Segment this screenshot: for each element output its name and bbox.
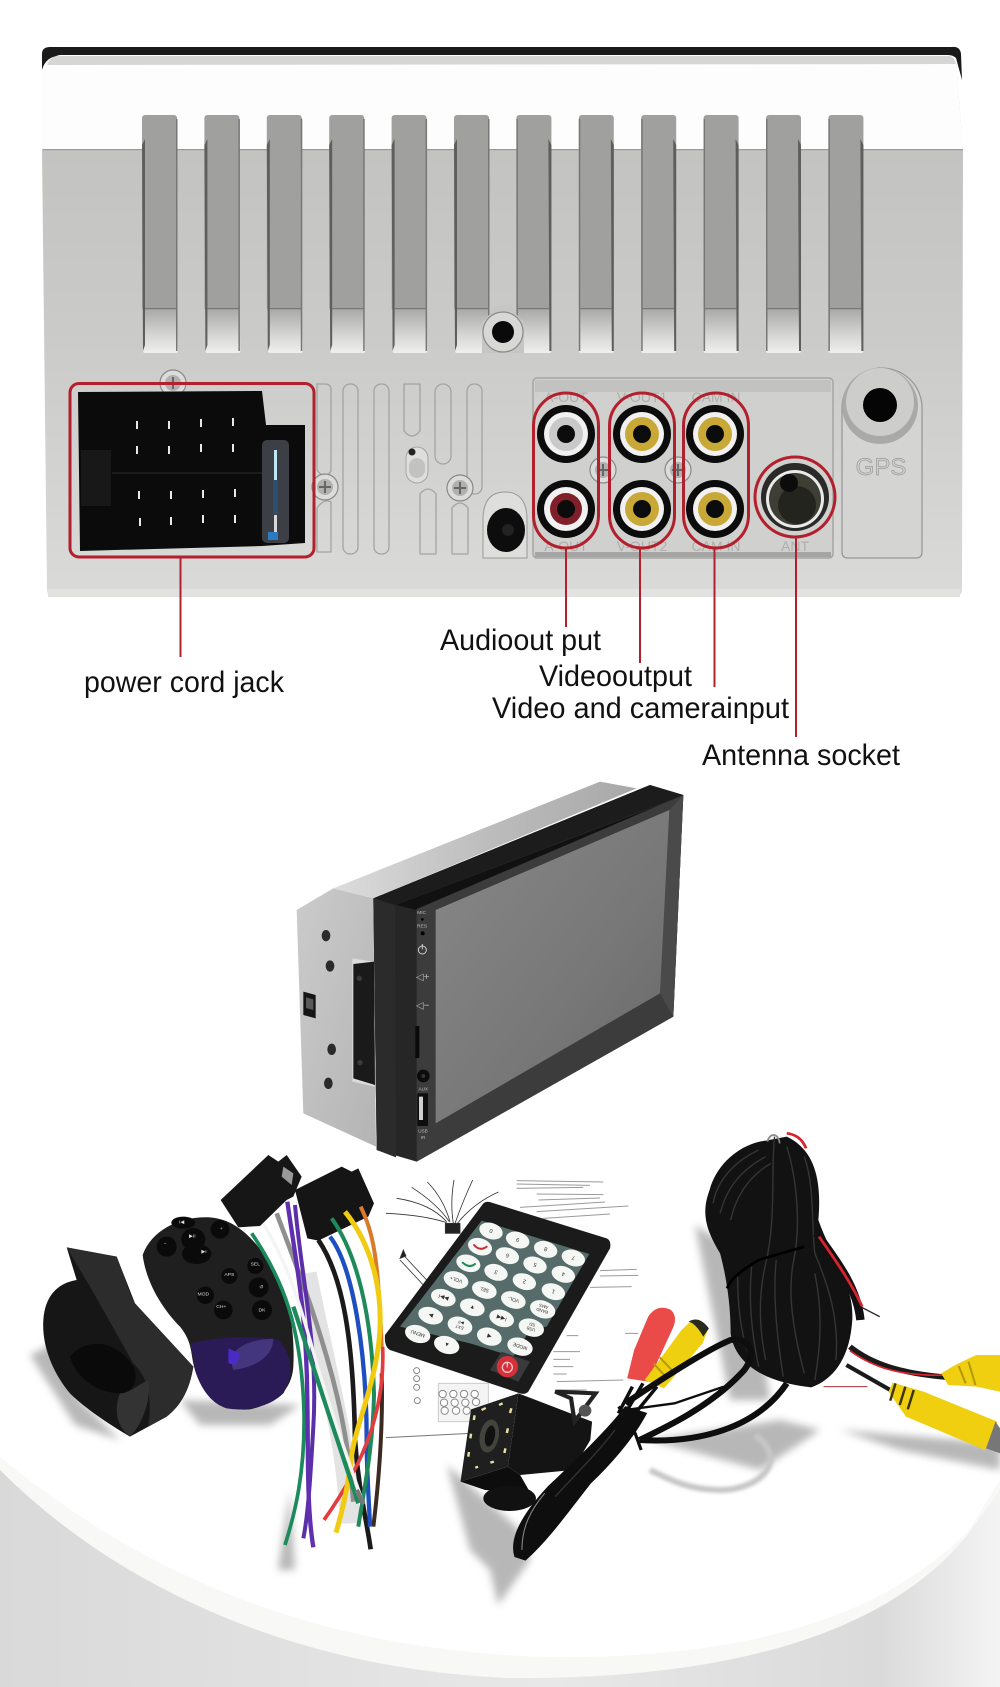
plate labels: ANT <box>781 538 809 554</box>
keypad labels, printed upside down: ▼ <box>469 1303 476 1310</box>
leader: video and camera input <box>714 548 716 687</box>
keypad labels, printed upside down: MODE <box>512 1340 528 1351</box>
power button <box>497 1356 518 1377</box>
looped signal cable <box>514 1340 787 1560</box>
side of chassis <box>297 888 376 1147</box>
cable shadow <box>650 1420 820 1470</box>
aux jack <box>417 1070 430 1082</box>
keypad labels, printed upside down: 6 <box>505 1251 510 1258</box>
side port <box>303 992 316 1018</box>
touch screen <box>436 810 669 1123</box>
plate labels: CAM IN <box>692 389 740 405</box>
keyhole slot <box>406 447 428 483</box>
side mounting holes <box>322 930 336 1089</box>
loose cable shadow loop <box>650 1435 770 1490</box>
keypad labels, printed upside down: I◀◀ <box>496 1313 508 1322</box>
wire: purple inner <box>287 1202 313 1547</box>
yellow video socket 1 <box>613 405 671 463</box>
yellow camera socket 1 <box>686 405 744 463</box>
coil strands <box>713 1137 837 1380</box>
strap shadow <box>30 1340 120 1440</box>
RCA sockets <box>537 405 744 538</box>
keypad labels, printed upside down: SD <box>529 1321 536 1328</box>
instruction manual sheet <box>386 1180 638 1438</box>
button labels: MOD <box>198 1291 210 1297</box>
plate labels: V-OUT1 <box>617 389 667 405</box>
camera lens <box>477 1418 502 1454</box>
keypad labels, printed upside down: 5 <box>533 1261 538 1267</box>
button labels: ↺ <box>259 1284 263 1290</box>
wire: orange <box>361 1207 382 1347</box>
keypad labels, printed upside down: 3 <box>494 1268 499 1275</box>
connector pins <box>136 418 236 526</box>
plate screws <box>590 457 691 483</box>
gray top loop <box>767 1135 780 1143</box>
outline: antenna socket <box>755 457 835 537</box>
wire: brown <box>373 1373 382 1527</box>
button labels: + <box>220 1226 223 1232</box>
side bracket <box>352 958 375 1087</box>
mic label: MIC <box>417 910 427 916</box>
manual diagram <box>386 1180 498 1285</box>
keypad labels, printed upside down: 8 <box>544 1245 548 1252</box>
call buttons icons <box>463 1245 487 1266</box>
aux label: AUX <box>419 1087 429 1092</box>
button labels: I◀ <box>179 1219 184 1225</box>
wire: white right <box>335 1237 357 1293</box>
wire: purple outer <box>295 1205 314 1538</box>
chassis screws <box>160 370 473 501</box>
keypad labels, printed upside down: 2 <box>522 1277 527 1284</box>
outline: video output <box>610 393 674 548</box>
mic and reset pinholes <box>421 918 425 935</box>
manual button grid <box>414 1368 488 1422</box>
remote body <box>385 1202 610 1394</box>
small red plug <box>627 1308 675 1382</box>
manual page bottom edge <box>386 1433 470 1438</box>
button labels: SEL <box>251 1261 260 1267</box>
wire: shadow band <box>307 1273 350 1523</box>
small yellow plug <box>645 1319 709 1388</box>
plate labels <box>544 389 809 554</box>
camera mounting bracket <box>555 1392 596 1422</box>
wire: green left <box>252 1233 304 1545</box>
white audio socket <box>537 405 595 463</box>
yellow video socket 2 <box>613 480 671 538</box>
main cable coil <box>705 1135 852 1387</box>
keypad area <box>400 1221 589 1357</box>
wire: white outline <box>357 1490 363 1504</box>
GPS label: GPS <box>856 454 906 481</box>
keypad labels, printed upside down: VOL+ <box>449 1274 463 1284</box>
panel: rear view of head unit <box>42 47 963 597</box>
rear coil shadow <box>695 1225 770 1400</box>
wire: yellow <box>336 1212 380 1533</box>
leader: audio output <box>565 548 567 627</box>
power button pad <box>490 1352 530 1382</box>
SD card slot <box>415 1026 419 1058</box>
shadows on the table <box>30 1225 1000 1605</box>
mounting screw hole <box>482 306 524 353</box>
top of chassis <box>333 782 637 898</box>
harness wires <box>252 1202 383 1549</box>
table surface and floor <box>0 1400 1000 1687</box>
panel: steering wheel controller and strap <box>43 1155 383 1549</box>
lower yellow plug <box>889 1383 1000 1453</box>
button labels: APS <box>224 1272 235 1278</box>
yellow plug shadow <box>840 1430 1000 1470</box>
manual text lines <box>517 1181 638 1390</box>
black top edge of unit <box>42 47 962 80</box>
controller buttons <box>157 1217 272 1320</box>
outline: audio output <box>534 393 598 548</box>
panel: head unit three-quarter view <box>297 782 683 1162</box>
wire shadow <box>278 1490 295 1570</box>
GPS socket <box>842 368 922 558</box>
wire: green center <box>293 1307 358 1503</box>
ventilation slots <box>317 384 482 554</box>
power connector <box>78 391 305 551</box>
volume up icon: ◁+ <box>416 972 430 983</box>
keypad labels, printed upside down: AMS <box>538 1302 549 1310</box>
button labels <box>164 1219 266 1313</box>
yellow camera socket 2 <box>686 480 744 538</box>
front panel controls <box>415 910 430 1140</box>
metal housing <box>42 56 963 597</box>
plate labels: V-OUT2 <box>617 538 667 554</box>
antenna socket <box>761 463 829 531</box>
wire harness connectors <box>221 1155 374 1241</box>
RCA plate <box>533 378 833 558</box>
keypad labels, printed upside down: 7 <box>571 1254 576 1260</box>
keypad labels, printed upside down: USB <box>526 1325 536 1333</box>
IR label: IR <box>421 1135 426 1140</box>
keypad labels, printed upside down: MENU <box>410 1328 426 1338</box>
keypad labels, printed upside down: 1 <box>551 1287 556 1294</box>
keypad labels, printed upside down: 9 <box>516 1236 520 1242</box>
front bezel frame <box>373 785 683 1162</box>
wire: gray <box>277 1213 353 1502</box>
button labels: ▶II <box>189 1233 196 1239</box>
keypad labels, printed upside down: ◀ <box>486 1332 493 1339</box>
callout label: video and camera input: Video and camerainput <box>492 692 790 725</box>
plate labels: A-OUT <box>544 389 588 405</box>
reset label: RES <box>417 924 428 930</box>
callout label: antenna socket: Antenna socket <box>702 739 901 772</box>
keypad labels, printed upside down: ▶ <box>427 1311 434 1318</box>
volume down icon: ◁− <box>416 1000 430 1011</box>
callout label: power cord jack: power cord jack <box>84 666 285 699</box>
USB label: USB <box>418 1128 428 1133</box>
controller shadow <box>180 1400 300 1425</box>
leader: antenna socket <box>795 537 797 737</box>
keypad labels, printed upside down <box>410 1227 576 1351</box>
keypad labels, printed upside down: EXT <box>455 1323 464 1331</box>
wire: blue <box>330 1237 370 1527</box>
plate labels: CAM IN <box>692 538 740 554</box>
keypad labels, printed upside down: 4 <box>561 1270 566 1277</box>
leader: video output <box>639 548 641 663</box>
keypad labels, printed upside down: SEL <box>479 1285 490 1293</box>
wire: red <box>324 1347 383 1520</box>
camera shadow <box>447 1465 530 1605</box>
keypad labels, printed upside down: VOL- <box>507 1294 520 1304</box>
keypad buttons <box>403 1220 587 1359</box>
keypad labels, printed upside down: BAND <box>536 1307 549 1315</box>
outline: power cord jack <box>70 384 314 557</box>
callout label: audio output: Audioout put <box>440 624 602 657</box>
wire: dark <box>318 1240 371 1549</box>
blade fuse <box>262 440 289 543</box>
upper yellow plug <box>941 1355 1000 1392</box>
panel: remote control <box>385 1202 610 1394</box>
outline: video and camera input <box>684 393 748 548</box>
aux jack <box>483 492 527 558</box>
wire: white <box>263 1223 363 1504</box>
button labels: CH+ <box>216 1304 226 1310</box>
panel: reversing camera and cables <box>461 1133 1000 1560</box>
leader: power cord jack <box>180 557 182 657</box>
keypad labels, printed upside down: ▶▶I <box>437 1292 449 1301</box>
plate labels: A-OUT <box>544 538 588 554</box>
camera <box>461 1392 596 1511</box>
callout outlines and leader lines <box>70 384 835 737</box>
button labels: − <box>164 1241 167 1247</box>
velcro strap <box>43 1247 193 1437</box>
wire: green right <box>332 1218 374 1527</box>
keypad labels, printed upside down: ▶II <box>457 1319 464 1326</box>
callout label: video output: Videooutput <box>539 660 693 693</box>
keypad labels, printed upside down: 0 <box>489 1227 494 1233</box>
red audio socket <box>537 480 595 538</box>
button labels: DK <box>259 1307 266 1313</box>
camera LEDs <box>468 1403 511 1468</box>
USB port <box>417 1093 428 1126</box>
power icon <box>418 944 426 954</box>
button labels: ▶I <box>201 1249 207 1255</box>
controller body <box>143 1217 294 1410</box>
cooling fins <box>142 115 863 353</box>
keypad labels, printed upside down: ▲ <box>443 1340 451 1348</box>
zip tie <box>727 1247 804 1288</box>
red and black power wire <box>787 1133 948 1390</box>
